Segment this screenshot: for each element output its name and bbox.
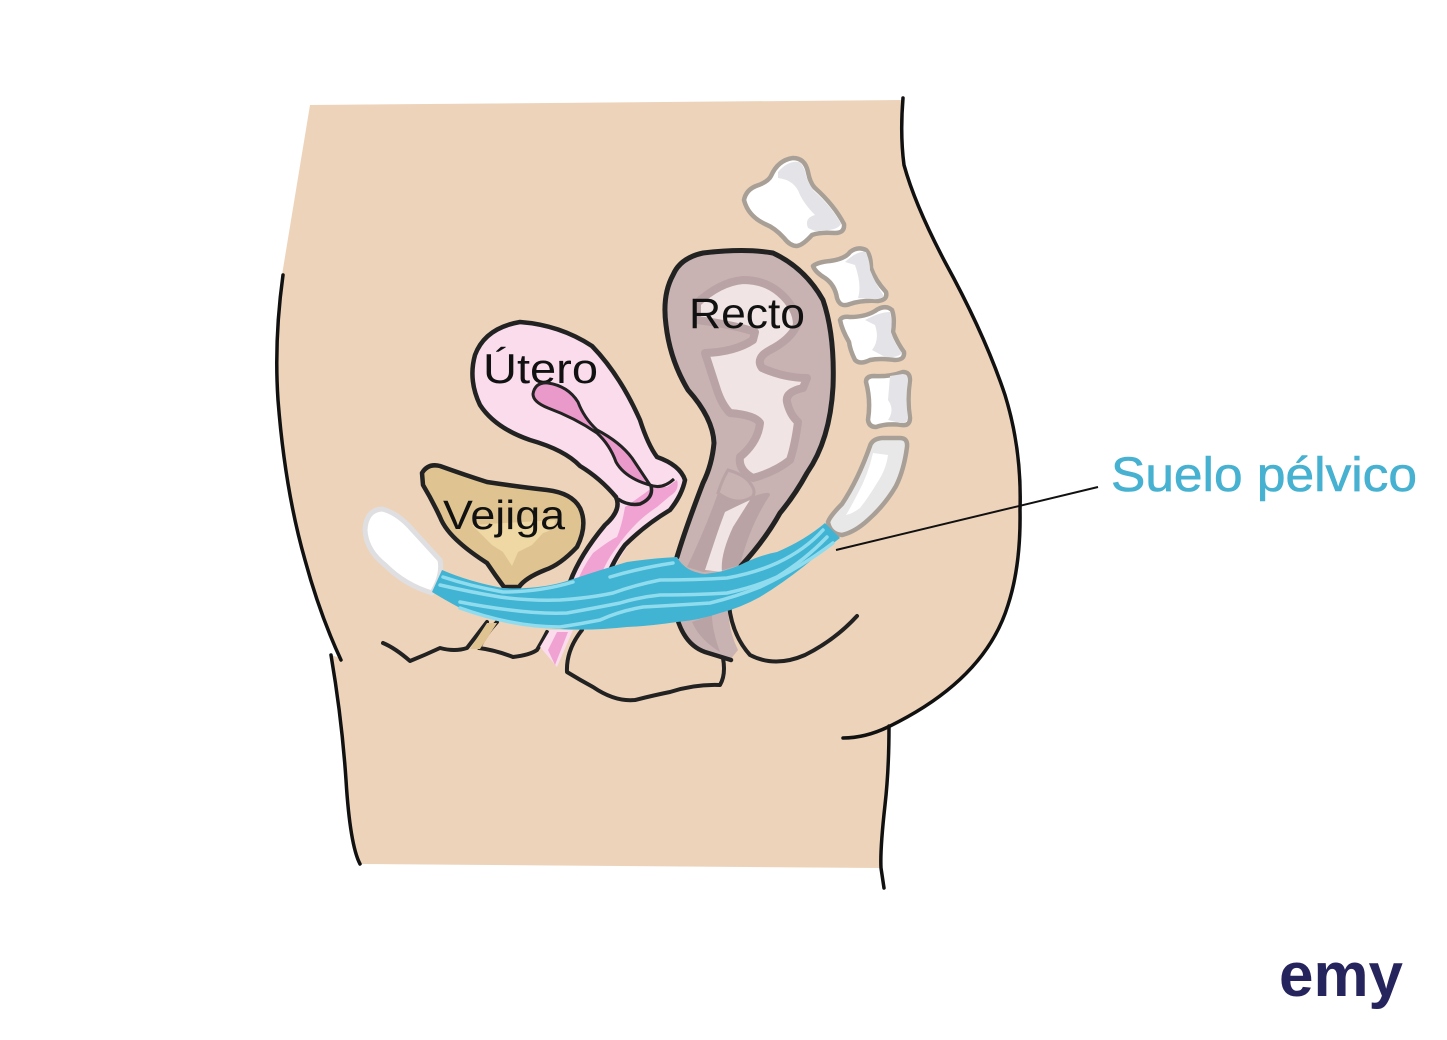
- label leader line: [836, 487, 1098, 550]
- pubic bone: [365, 509, 441, 593]
- sacral bone 4: [866, 372, 910, 427]
- organ: uterus and vagina: [472, 322, 685, 667]
- organ: lower rectum and anal canal lines: [677, 618, 731, 660]
- organ: bladder: [422, 465, 583, 587]
- coccyx bone: [828, 438, 907, 535]
- body silhouette: [277, 98, 1020, 888]
- urethra fill: [470, 623, 497, 649]
- label: Suelo pélvico: Suelo pélvico: [1111, 449, 1417, 502]
- sacral bone 1: [744, 158, 844, 246]
- bones: sacrum and coccyx: [744, 158, 910, 535]
- label: Recto: Recto: [689, 290, 805, 338]
- sacral bone 2: [813, 248, 886, 305]
- logo: emy: emy: [1279, 941, 1404, 1010]
- perineal and gluteal skin lines: [383, 605, 857, 700]
- uterine cavity: [533, 383, 650, 485]
- sacral bone 3: [840, 307, 904, 362]
- pelvic floor muscle: [432, 523, 840, 630]
- lower vagina: [540, 630, 573, 667]
- organ: rectum: [665, 250, 833, 660]
- label: Vejiga: Vejiga: [443, 492, 565, 538]
- label: Útero: Útero: [483, 345, 598, 392]
